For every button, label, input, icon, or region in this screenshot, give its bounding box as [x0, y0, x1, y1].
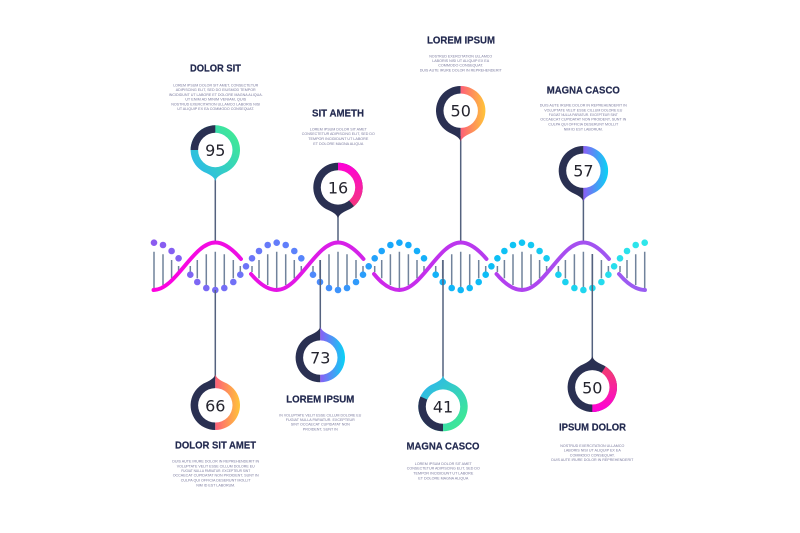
pin: 50 orange: 50 — [451, 102, 471, 121]
text block: LOREM IPSUM DOLOR SIT AMET — [310, 126, 367, 132]
text block: NOSTRUD EXERCITATION ULLAMCO — [560, 443, 624, 448]
text block: LABORIS NISI UT ALIQUIP EX EA — [564, 448, 621, 453]
text block: UT ENIM AD MINIM VENIAM, QUIS — [185, 96, 247, 102]
heading: IPSUM DOLOR — [559, 422, 626, 433]
text block: DUIS AUTE IRURE DOLOR IN REPREHENDERIT — [420, 68, 502, 73]
text block: LOREM IPSUM DOLOR SIT AMET, CONSECTETUR — [173, 82, 258, 88]
text block — [540, 103, 627, 132]
panel: magna casco 41 — [406, 376, 480, 480]
helix solid strand — [154, 242, 645, 290]
helix dots strand — [151, 239, 648, 293]
panel: magna casco 57 — [540, 85, 627, 211]
text block: LABORIS NISI UT ALIQUIP EX EA — [432, 58, 490, 63]
text block: VOLUPTATE VELIT ESSE CILLUM DOLORE EU — [544, 107, 622, 112]
text block: NOSTRUD EXERCITATION ULLAMCO LABORIS NISI — [171, 102, 260, 106]
text block: TEMPOR INCIDIDUNT UT LABORE — [308, 136, 369, 141]
heading: LOREM IPSUM — [427, 35, 495, 46]
panel: lorem ipsum 73 — [279, 318, 361, 432]
panel: dolor sit amet 66 — [172, 365, 259, 487]
pin: 41: 41 — [433, 398, 453, 417]
text block: INCIDIDUNT UT LABORE ET DOLORE MAGNA ALIQUA. — [169, 92, 263, 97]
heading: MAGNA CASCO — [406, 441, 480, 452]
text block: ADIPISCING ELIT, SED DO EIUSMOD TEMPOR — [176, 87, 256, 92]
heading: DOLOR SIT AMET — [175, 440, 256, 451]
chart: DNA helix — [151, 136, 648, 380]
text block: UT ALIQUIP EX EA COMMODO CONSEQUAT. — [177, 106, 254, 111]
heading: SIT AMETH — [312, 109, 364, 120]
text block: ET DOLORE MAGNA ALIQUA — [418, 475, 469, 480]
text block: CULPA QUI OFFICIA DESERUNT MOLLIT — [181, 478, 251, 483]
pin: 50 pink: 50 — [582, 378, 602, 397]
text block — [169, 82, 263, 111]
text block: TEMPOR INCIDIDUNT UT LABORE — [413, 470, 474, 475]
text block: PROIDENT, SUNT IN — [303, 427, 338, 432]
text block — [172, 459, 259, 487]
text block — [551, 443, 634, 462]
text block: COMMODO CONSEQUAT. — [438, 63, 483, 68]
text block: CONSECTETUR ADIPISCING ELIT, SED DO — [302, 131, 375, 136]
text block: DUIS AUTE IRURE DOLOR IN REPREHENDERIT IN — [172, 459, 259, 464]
heading: DOLOR SIT — [190, 64, 241, 75]
text block: OCCAECAT CUPIDATAT NON PROIDENT, SUNT IN — [540, 117, 626, 122]
text block — [302, 126, 375, 146]
text block: DUIS AUTE IRURE DOLOR IN REPREHENDERIT IN — [540, 103, 627, 108]
text block: NIM ID EST LABORUM. — [564, 127, 603, 132]
helix rungs — [154, 252, 645, 288]
text block: FUGIAT NULLA PARIATUR. EXCEPTEUR — [286, 417, 355, 422]
text block: OCCAECAT CUPIDATAT NON PROIDENT, SUNT IN — [173, 473, 259, 478]
text block: CULPA QUI OFFICIA DESERUNT MOLLIT — [548, 122, 619, 127]
text block: NIM ID EST LABORUM. — [196, 482, 235, 487]
text block — [407, 461, 480, 480]
pin: 57: 57 — [573, 162, 594, 181]
infographic canvas — [150, 36, 648, 486]
text block: ET DOLORE MAGNA ALIQUA — [313, 141, 364, 146]
heading: LOREM IPSUM — [286, 394, 354, 405]
panel: lorem ipsum 50 — [420, 35, 502, 151]
connector lines — [215, 136, 592, 380]
text block: SINT OCCAECAT CUPIDATAT NON — [291, 422, 350, 427]
pin: 73: 73 — [310, 349, 330, 368]
panel: dolor sit 95 — [169, 64, 263, 190]
text block: IN VOLUPTATE VELIT ESSE CILLUM DOLORE EU — [279, 412, 361, 417]
heading: MAGNA CASCO — [547, 85, 620, 96]
pin: 95: 95 — [205, 141, 225, 160]
text block: DUIS AUTE IRURE DOLOR IN REPREHENDERIT — [551, 457, 634, 462]
pin: 66: 66 — [205, 396, 225, 415]
text block: LOREM IPSUM DOLOR SIT AMET — [415, 461, 472, 466]
panel: ipsum dolor 50 — [551, 347, 634, 462]
text block: NOSTRUD EXERCITATION ULLAMCO — [429, 53, 492, 58]
text block: COMMODO CONSEQUAT. — [570, 452, 615, 457]
text block: CONSECTETUR ADIPISCING ELIT, SED DO — [407, 466, 480, 471]
pin: 16: 16 — [328, 178, 348, 197]
text block — [420, 53, 502, 73]
panel: sit ameth 16 — [302, 109, 375, 218]
text block — [279, 412, 361, 432]
text block: FUGIAT NULLA PARIATUR. EXCEPTEUR SINT — [549, 112, 618, 117]
text block: VOLUPTATE VELIT ESSE CILLUM DOLORE EU — [177, 463, 255, 468]
text block: FUGIAT NULLA PARIATUR. EXCEPTEUR SINT — [181, 468, 251, 473]
